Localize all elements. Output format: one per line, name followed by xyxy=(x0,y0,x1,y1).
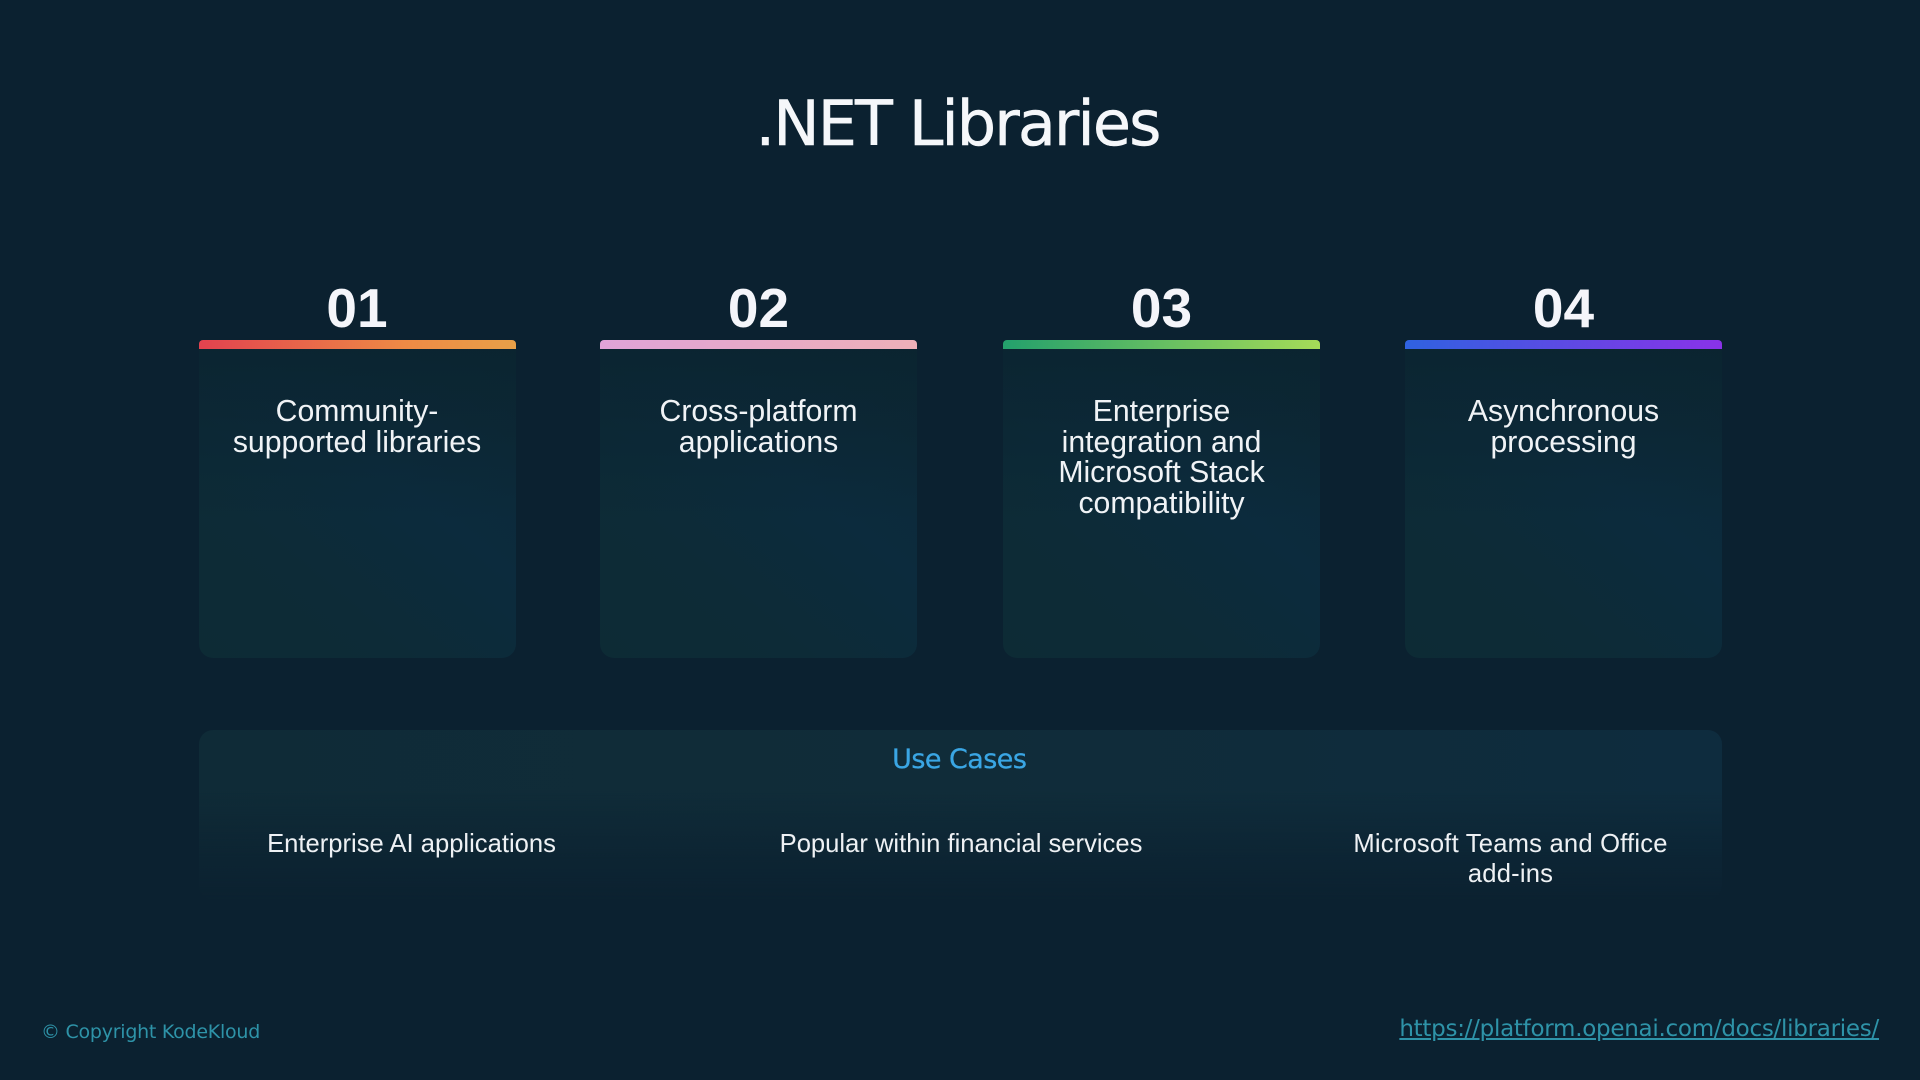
card body 04 xyxy=(1405,349,1722,658)
description 01: supported libraries xyxy=(233,426,481,459)
description 03 xyxy=(1058,395,1265,520)
description 03: integration and xyxy=(1062,426,1261,459)
panel: use cases xyxy=(198,730,1722,900)
accent bar 01 xyxy=(198,340,516,349)
use case: Microsoft Teams: add-ins xyxy=(1468,860,1553,888)
heading: use cases: Use Cases xyxy=(892,744,1026,775)
copyright: © Copyright KodeKloud xyxy=(41,1021,260,1043)
number 03: 03 xyxy=(1131,277,1192,339)
description 01 xyxy=(233,395,481,459)
card body 02 xyxy=(600,349,917,658)
panel: card 02 xyxy=(600,277,917,658)
use case: financial services: Popular within financial services xyxy=(780,830,1142,858)
description 02 xyxy=(660,395,857,459)
number 04: 04 xyxy=(1533,277,1594,339)
title: .NET Libraries xyxy=(755,87,1160,160)
panel: card 04 xyxy=(1405,277,1722,658)
description 04 xyxy=(1468,395,1659,459)
panel: card 01 xyxy=(199,277,516,658)
accent bar 04 xyxy=(1405,340,1722,349)
card body 03 xyxy=(1003,349,1320,658)
description 01: Community- xyxy=(276,395,438,428)
use case: Microsoft Teams xyxy=(1353,830,1668,888)
panel: card 03 xyxy=(1003,277,1320,658)
description 03: Enterprise xyxy=(1093,395,1230,428)
number 01: 01 xyxy=(326,277,388,339)
description 04: Asynchronous xyxy=(1468,395,1659,428)
description 02: Cross-platform xyxy=(660,395,857,428)
accent bar 02 xyxy=(600,340,917,349)
description 03: compatibility xyxy=(1078,487,1245,520)
accent bar 03 xyxy=(1003,340,1320,349)
source link: https://platform.openai.com/docs/libraries/ xyxy=(1399,1016,1879,1042)
use case: enterprise AI: Enterprise AI applications xyxy=(267,830,556,858)
description 03: Microsoft Stack xyxy=(1058,456,1265,489)
description 02: applications xyxy=(679,426,838,459)
card body 01 xyxy=(198,349,516,658)
number 02: 02 xyxy=(728,277,789,339)
description 04: processing xyxy=(1490,426,1636,459)
use case: Microsoft Teams: Microsoft Teams and Office xyxy=(1353,830,1668,858)
